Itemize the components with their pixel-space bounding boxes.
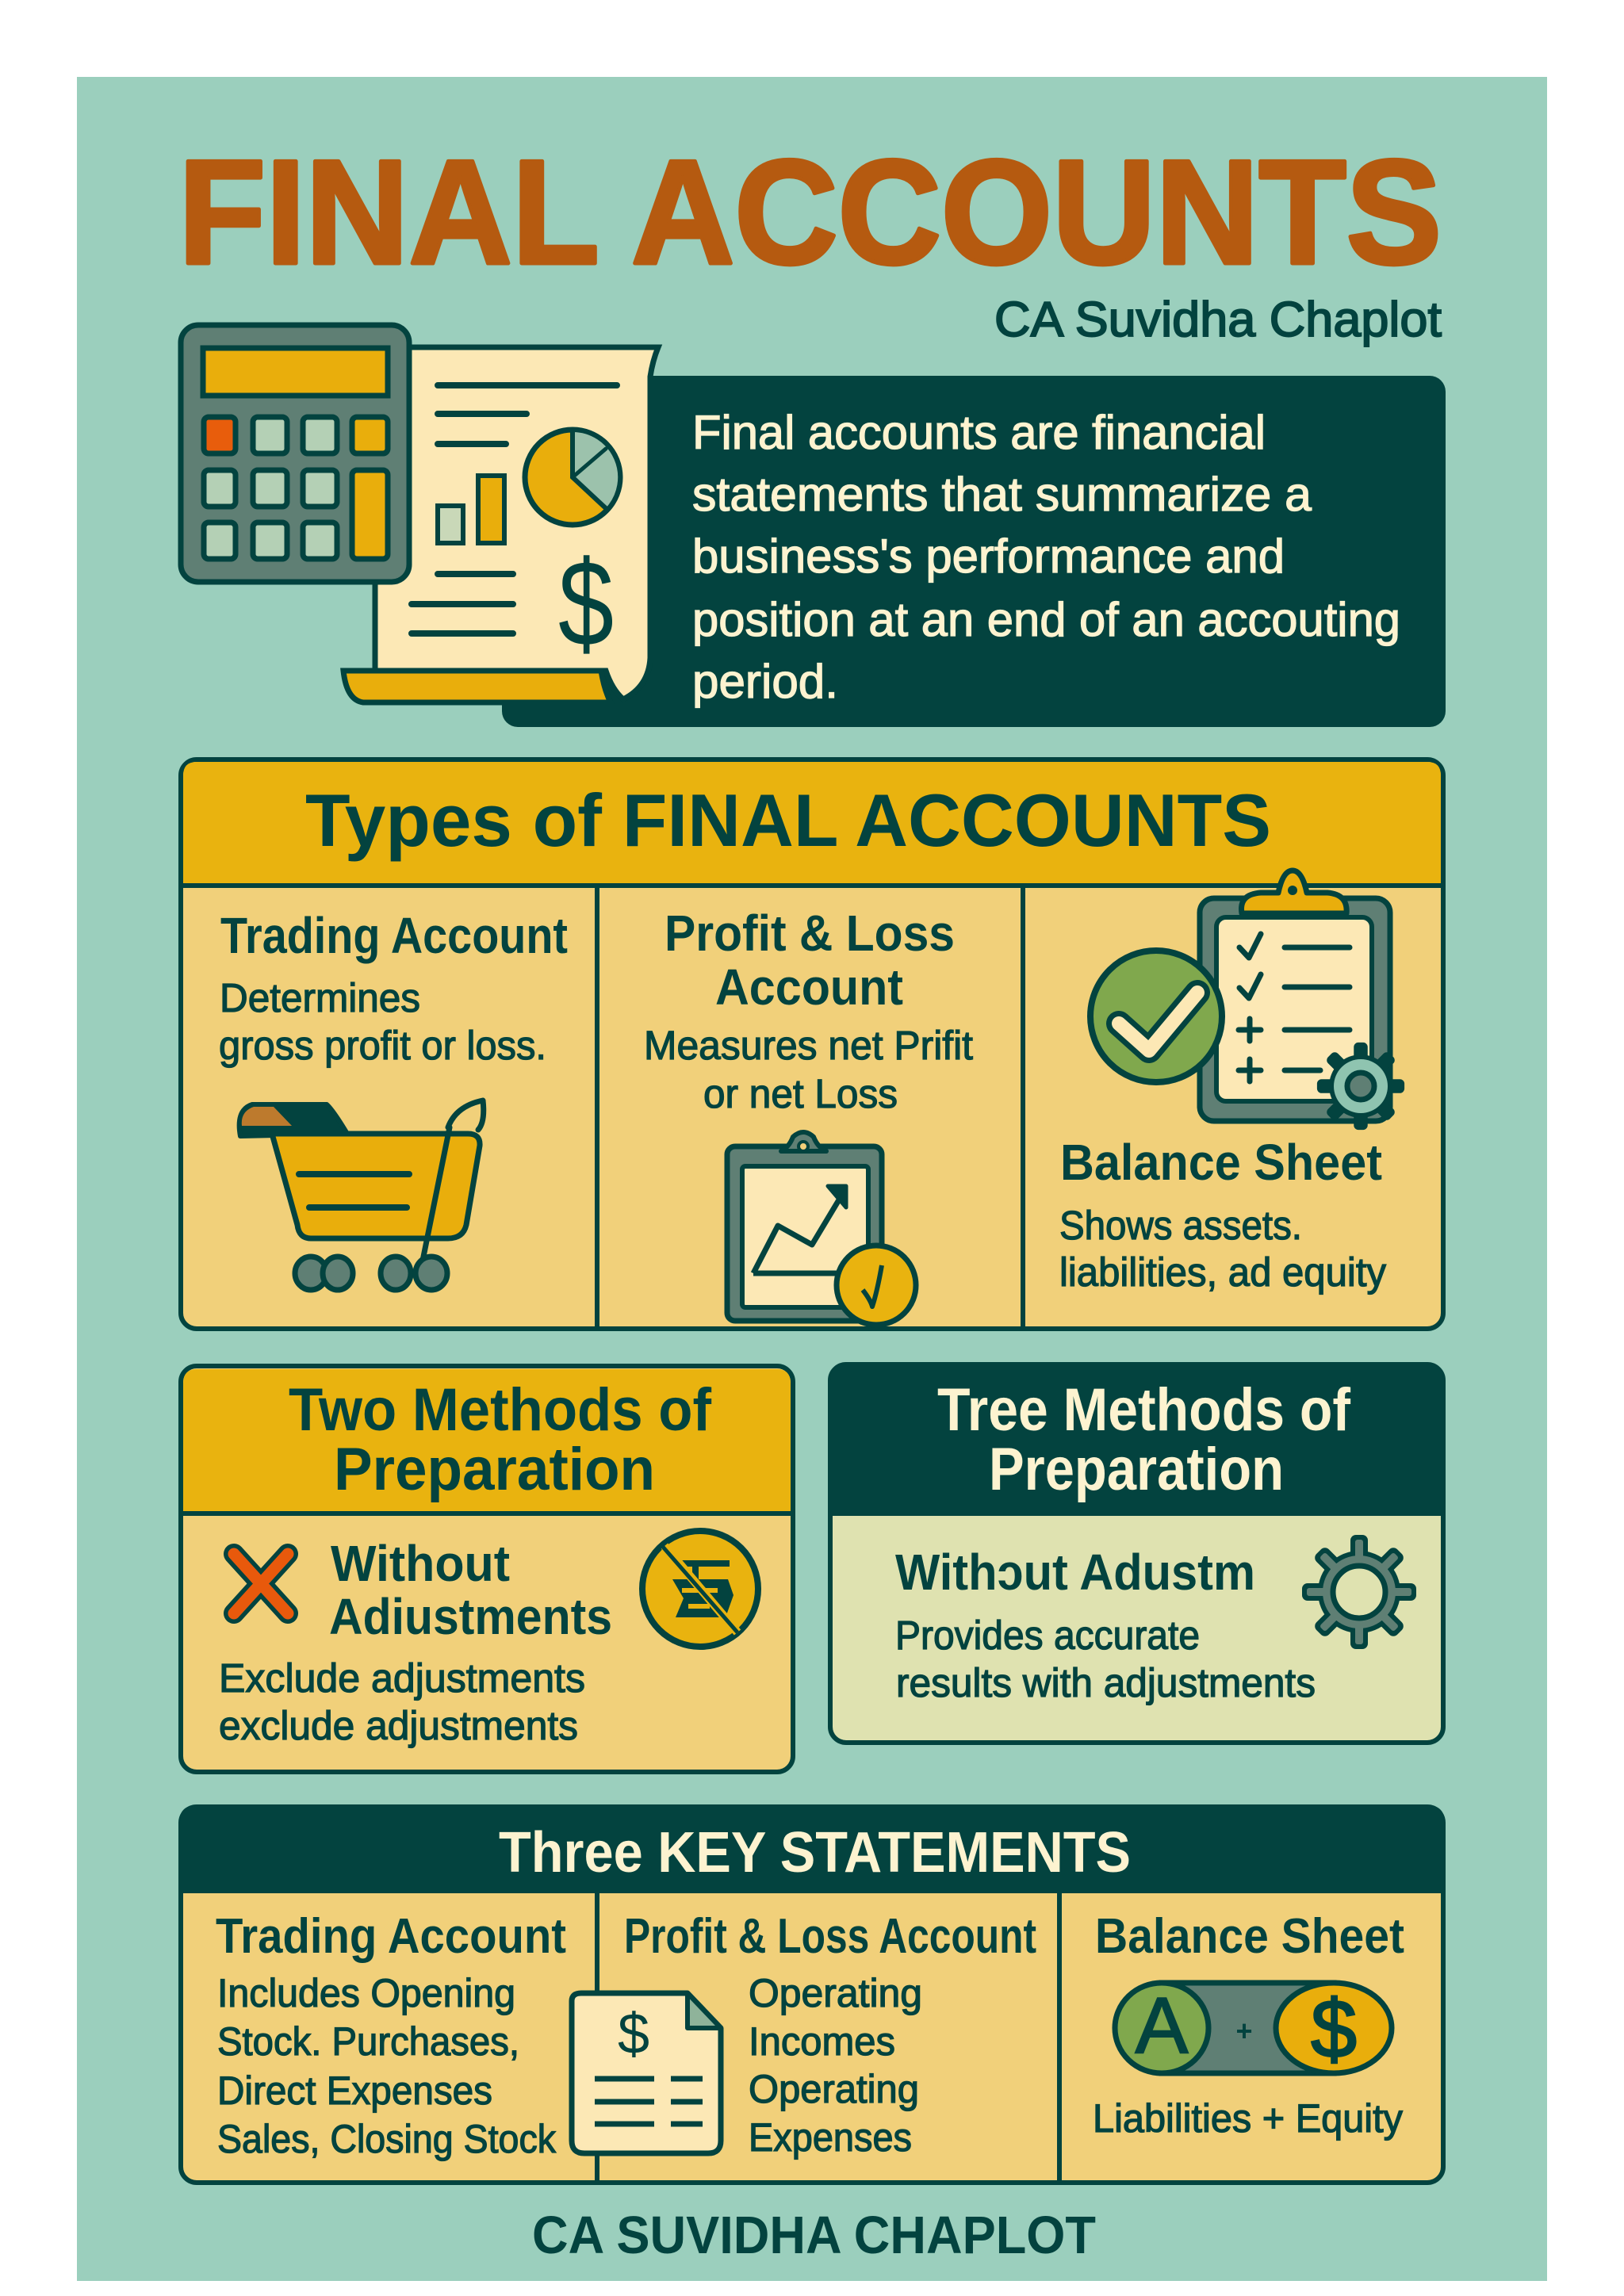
intro text [692, 406, 1400, 708]
trading account column text [216, 1909, 566, 2161]
balance sheet text: Shows assets. [1059, 1203, 1302, 1248]
profit and loss text: Account [715, 959, 903, 1016]
profit and loss column text: Profit & Loss Account [624, 1909, 1036, 1964]
panel: types of final accounts [181, 760, 1443, 1329]
icon: assets plus dollar pill: $ [1311, 1984, 1357, 2076]
intro description box [502, 376, 1446, 727]
intro text: position at an end of an accouting [692, 593, 1400, 646]
trading account text [219, 907, 568, 1068]
balance sheet text [1059, 1134, 1386, 1295]
profit and loss text: Measures net Prifit [644, 1023, 973, 1068]
intro text: statements that summarize a [692, 468, 1312, 521]
icon: calculator [181, 325, 409, 582]
exclude adjustments text: exclude adjustments [219, 1703, 578, 1748]
profit and loss column text [624, 1909, 1036, 2160]
profit and loss column text: Expenses [749, 2115, 912, 2160]
intro text: Final accounts are financial [692, 406, 1266, 459]
icon: assets plus dollar pill: + [1235, 2015, 1253, 2047]
trading account text: Determines [220, 975, 420, 1020]
icon: assets plus dollar pill: A [1136, 1981, 1189, 2070]
intro text: business's performance and [692, 530, 1285, 583]
heading: tree methods [937, 1376, 1351, 1503]
subtitle: CA Suvidha Chaplot [994, 293, 1442, 347]
intro text: period. [692, 655, 838, 708]
exclude adjustments text: Exclude adjustments [219, 1655, 585, 1701]
icon: shopping cart [239, 1100, 484, 1290]
trading account text: gross profit or loss. [219, 1023, 546, 1068]
without adjustments label: Without [331, 1535, 510, 1592]
icon: financial statement paper [343, 347, 658, 702]
title: FINAL ACCOUNTS [178, 129, 1442, 295]
heading: two methods: Preparation [334, 1436, 655, 1503]
trading account column text: Stock. Purchases, [217, 2019, 519, 2064]
trading account column text: Trading Account [216, 1909, 566, 1964]
exclude adjustments text [219, 1655, 585, 1748]
balance sheet column: Balance Sheet [1095, 1909, 1404, 1964]
icon: document with dollar sign [572, 1993, 721, 2153]
panel: three key statements [179, 1805, 1445, 2183]
profit and loss column text: Operating [749, 2067, 919, 2111]
without adjustments label: Adiustments [329, 1588, 612, 1645]
icon: document with dollar sign: $ [618, 2003, 649, 2066]
icon: assets plus dollar pill [1115, 1981, 1392, 2076]
balance sheet text: liabilities, ad equity [1059, 1249, 1386, 1295]
panel: tree methods of preparation [830, 1364, 1443, 1743]
heading: tree methods: Tree Methods of [937, 1376, 1351, 1444]
trading account column text: Includes Opening [217, 1971, 515, 2015]
profit and loss column text: Incomes [749, 2019, 895, 2064]
panel: two methods of preparation [181, 1366, 793, 1772]
trading account column text: Direct Expenses [217, 2068, 492, 2113]
trading account text: Trading Account [220, 907, 568, 964]
footer credit: CA SUVIDHA CHAPLOT [532, 2206, 1096, 2265]
balance sheet column: Liabilities + Equity [1093, 2096, 1403, 2141]
heading: types of final accounts: Types of FINAL ACCOUNTS [305, 779, 1271, 862]
heading: two methods: Two Methods of [289, 1376, 712, 1444]
heading: two methods [289, 1376, 712, 1503]
heading: three key statements: Three KEY STATEMENTS [499, 1821, 1131, 1885]
profit and loss text: Profit & Loss [665, 905, 955, 962]
without adjustments label [329, 1535, 612, 1645]
profit and loss column text: Operating [749, 1971, 922, 2015]
profit and loss text [644, 905, 973, 1116]
description text: Provides accurate [895, 1613, 1200, 1658]
icon: checklist clipboard with check badge and gear [1090, 871, 1404, 1130]
icon: gear [1302, 1535, 1416, 1649]
icon: red cross [234, 1554, 288, 1613]
icon: prohibited adjustments [642, 1531, 758, 1647]
profit and loss text: or net Loss [703, 1071, 898, 1116]
icon: financial statement paper: $ [558, 535, 614, 672]
description text [895, 1613, 1316, 1705]
balance sheet column [1093, 1909, 1404, 2141]
icon: clipboard with rising chart [727, 1132, 916, 1325]
description text: results with adjustments [896, 1660, 1316, 1705]
without adjustment label: Withɔut Adustm [895, 1544, 1255, 1601]
trading account column text: Sales, Closing Stock [217, 2117, 557, 2161]
heading: tree methods: Preparation [989, 1436, 1284, 1503]
balance sheet text: Balance Sheet [1060, 1134, 1382, 1191]
